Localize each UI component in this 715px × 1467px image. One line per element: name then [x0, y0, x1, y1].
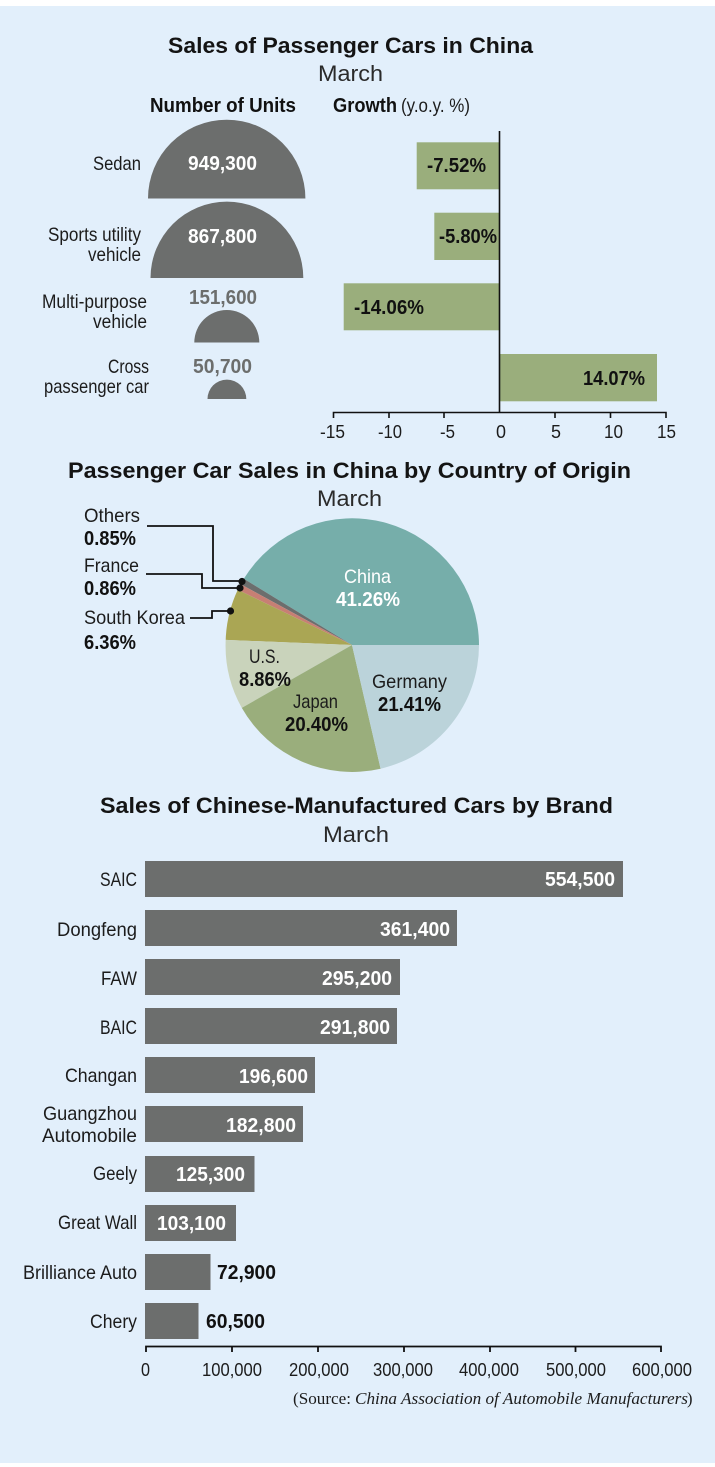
bar: chery: 60,500 — [206, 1311, 265, 1333]
sports utility vehicle — [48, 202, 303, 278]
bar: great wall — [58, 1205, 236, 1241]
bar: guangzhou automobile: 182,800 — [226, 1115, 296, 1137]
brand axis: 500,000 — [546, 1360, 606, 1380]
brand axis: 600,000 — [632, 1360, 692, 1380]
growth axis — [320, 131, 676, 442]
brand axis: 400,000 — [459, 1360, 519, 1380]
bar: saic: 554,500 — [545, 869, 615, 891]
source note: China Association of Automobile Manufacturers — [355, 1389, 688, 1408]
title: country of origin: March — [317, 486, 382, 511]
germany label — [372, 671, 447, 716]
growth axis: 10 — [604, 422, 623, 442]
growth axis: -10 — [378, 422, 402, 442]
bar chart: brands — [23, 861, 623, 1339]
us label: 8.86% — [239, 669, 291, 691]
bar: great wall: Great Wall — [58, 1212, 137, 1234]
cross passenger car: Cross — [108, 356, 149, 378]
title: sales by brand: Sales of Chinese-Manufactured Cars by Brand — [100, 793, 613, 818]
semicircle chart: number of units — [42, 120, 305, 399]
bar: saic — [100, 861, 623, 897]
bar: cross passenger car growth — [500, 354, 657, 401]
source note: (Source: — [293, 1389, 351, 1408]
bar: geely — [93, 1156, 254, 1192]
callout: france: 0.86% — [84, 578, 136, 600]
callout: south korea: 6.36% — [84, 632, 136, 654]
growth axis: 15 — [657, 422, 676, 442]
bar: dongfeng: 361,400 — [380, 919, 450, 941]
bar: geely: Geely — [93, 1163, 137, 1185]
multi-purpose vehicle: Multi-purpose — [42, 291, 147, 313]
bar: suv growth — [434, 213, 500, 260]
bar: cross passenger car growth: 14.07% — [583, 368, 645, 390]
germany label: 21.41% — [378, 694, 441, 716]
callout: others: 0.85% — [84, 528, 136, 550]
heading: growth: (y.o.y. %) — [401, 95, 470, 117]
bar: faw: 295,200 — [322, 968, 392, 990]
panel: sales by type — [42, 33, 676, 442]
bar: baic: BAIC — [100, 1017, 137, 1039]
cross passenger car: 50,700 — [193, 356, 252, 378]
sedan: Sedan — [93, 153, 141, 175]
multi-purpose vehicle: vehicle — [93, 311, 147, 333]
bar: baic: 291,800 — [320, 1017, 390, 1039]
bar: chery: Chery — [90, 1311, 137, 1333]
bar chart: growth — [320, 131, 676, 442]
growth axis: 0 — [496, 422, 506, 442]
bar: changan — [65, 1057, 315, 1093]
bar: faw — [101, 959, 400, 995]
sedan — [93, 120, 305, 198]
callout: france: France — [84, 555, 139, 577]
bar: dongfeng — [57, 910, 457, 946]
heading: number of units: Number of Units — [150, 95, 296, 117]
sports utility vehicle: 867,800 — [188, 226, 257, 248]
bar: brilliance auto: Brilliance Auto — [23, 1262, 137, 1284]
japan label: Japan — [293, 691, 338, 713]
source note: ) — [687, 1389, 692, 1408]
growth axis: -15 — [320, 422, 345, 442]
multi-purpose vehicle: 151,600 — [189, 287, 257, 309]
sports utility vehicle: vehicle — [88, 244, 141, 266]
growth axis: -5 — [440, 422, 455, 442]
bar: suv growth: -5.80% — [439, 226, 497, 248]
callout: south korea: South Korea — [84, 607, 185, 629]
china label — [336, 566, 400, 611]
cross passenger car: passenger car — [44, 376, 149, 398]
title: sales of passenger cars: Sales of Passenger Cars in China — [168, 33, 534, 58]
title: sales by brand — [100, 793, 613, 847]
bar: mpv growth: -14.06% — [354, 297, 424, 319]
title: country of origin: Passenger Car Sales in China by Country of Origin — [68, 458, 631, 483]
us label — [239, 646, 291, 691]
bar: saic: SAIC — [100, 869, 137, 891]
bar: faw: FAW — [101, 968, 138, 990]
bar: brilliance auto: 72,900 — [217, 1262, 276, 1284]
sedan: 949,300 — [188, 153, 257, 175]
germany label: Germany — [372, 671, 447, 693]
callout: others — [84, 505, 246, 585]
china label: 41.26% — [336, 589, 400, 611]
callout: france — [84, 555, 244, 600]
title: country of origin — [68, 458, 631, 511]
bar: guangzhou automobile — [42, 1103, 303, 1147]
multi-purpose vehicle — [42, 287, 259, 342]
bar: mpv growth — [344, 283, 500, 330]
bar: great wall: 103,100 — [157, 1213, 226, 1235]
bar: guangzhou automobile: Guangzhou — [43, 1103, 137, 1125]
japan label: 20.40% — [285, 714, 348, 736]
brand axis: 300,000 — [373, 1360, 433, 1380]
callout: others: Others — [84, 505, 140, 527]
brand axis: 0 — [141, 1360, 150, 1380]
brand axis — [141, 1346, 692, 1380]
panel: country of origin — [68, 458, 631, 772]
bar: sedan growth: -7.52% — [427, 155, 486, 177]
pie chart — [226, 518, 479, 772]
bar: baic — [100, 1008, 397, 1044]
bar: sedan growth — [417, 142, 500, 189]
us label: U.S. — [249, 646, 280, 668]
bar: changan: 196,600 — [239, 1066, 308, 1088]
heading: growth: Growth — [333, 95, 397, 117]
brand axis: 100,000 — [202, 1360, 262, 1380]
bar: changan: Changan — [65, 1065, 137, 1087]
cross passenger car — [44, 356, 252, 399]
bar: geely: 125,300 — [176, 1164, 245, 1186]
title: sales of passenger cars: March — [318, 61, 383, 86]
heading: growth — [333, 95, 470, 117]
bar: guangzhou automobile: Automobile — [42, 1125, 137, 1147]
growth axis: 5 — [551, 422, 561, 442]
japan label — [285, 691, 348, 736]
sports utility vehicle: Sports utility — [48, 224, 141, 246]
title: sales of passenger cars — [168, 33, 534, 86]
bar: chery — [90, 1303, 265, 1339]
bar: brilliance auto — [23, 1254, 276, 1290]
china label: China — [344, 566, 391, 588]
brand axis: 200,000 — [289, 1360, 349, 1380]
bar: dongfeng: Dongfeng — [57, 919, 137, 941]
title: sales by brand: March — [323, 822, 389, 847]
callout: south korea — [84, 607, 234, 654]
panel: sales by brand — [23, 793, 692, 1408]
